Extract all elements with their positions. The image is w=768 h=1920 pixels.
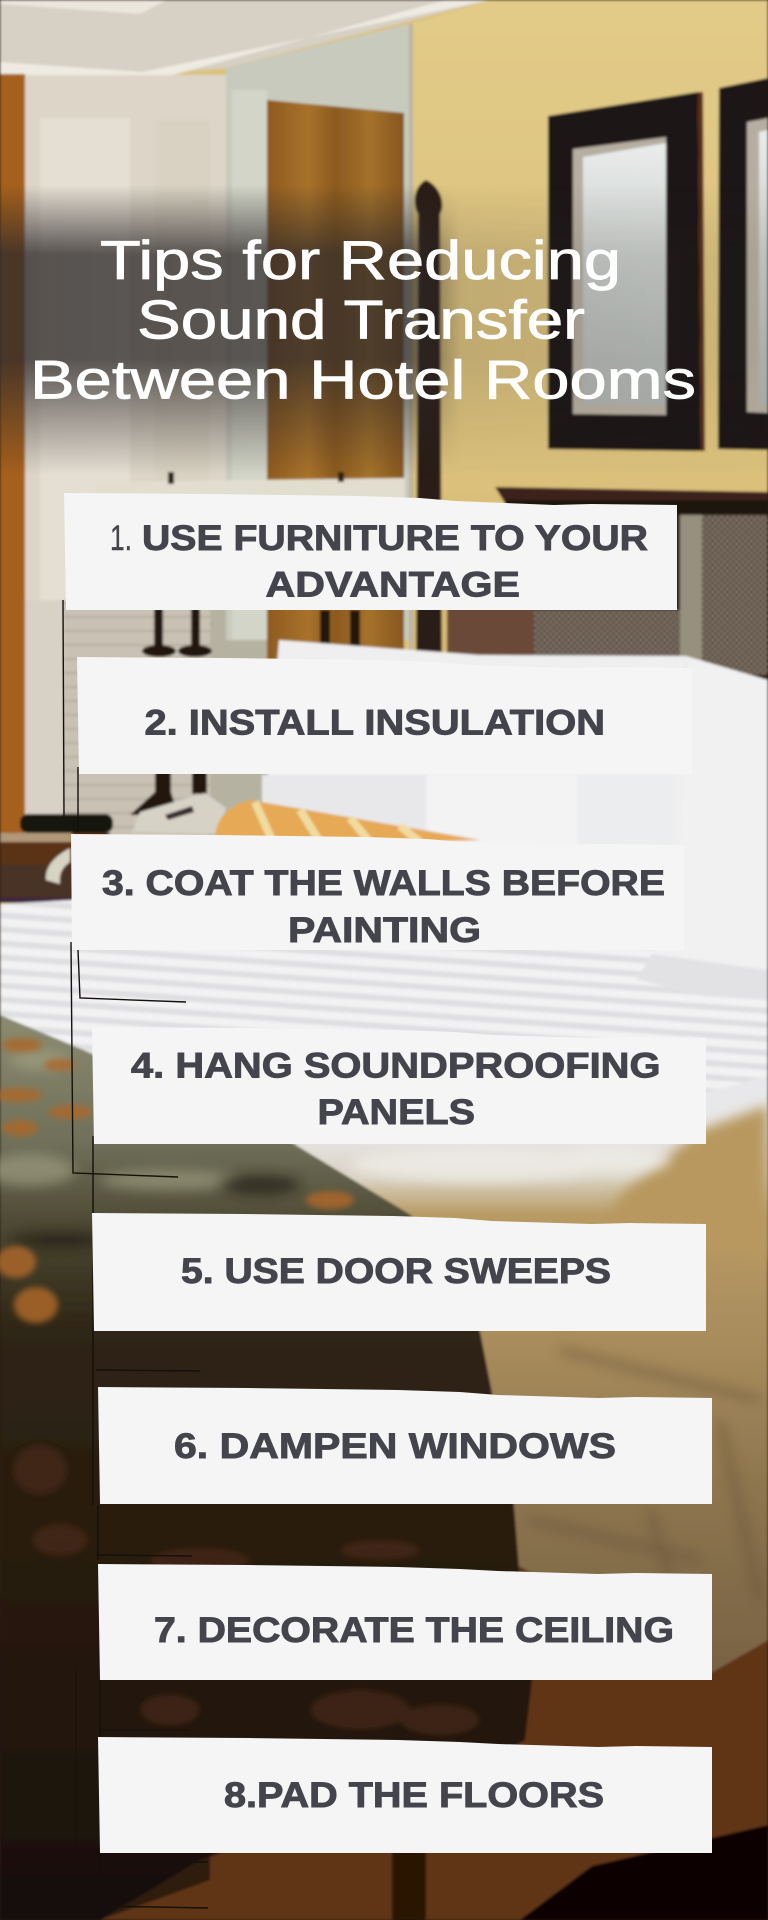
- headboard: [447, 487, 768, 682]
- lamp bases: [130, 608, 360, 815]
- wooden door strip: [0, 74, 25, 844]
- flowers: [0, 1038, 354, 1323]
- shutters wall: [0, 75, 228, 845]
- tip 8 panel: 8.PAD THE FLOORS: [224, 1775, 604, 1815]
- bed post: [415, 180, 442, 700]
- picture frame right: [718, 78, 768, 450]
- mirror: [226, 24, 412, 640]
- title: [30, 230, 696, 410]
- tip 6 panel: [98, 1387, 712, 1504]
- floral leaves: [0, 1050, 240, 1190]
- bed linen: [0, 896, 768, 1700]
- tip 1 panel: USE FURNITURE TO YOUR: [142, 518, 648, 558]
- bottom right shadow: [520, 1825, 768, 1920]
- tip 1 panel: 1.: [110, 518, 132, 558]
- yellow wall: [412, 0, 768, 700]
- dark shade behind title: [0, 185, 768, 475]
- curtain reflection: [267, 100, 404, 660]
- pillows: [262, 640, 686, 860]
- tip 7 panel: 7. DECORATE THE CEILING: [154, 1610, 674, 1650]
- title: Between Hotel Rooms: [30, 350, 696, 410]
- tip 6 panel: 6. DAMPEN WINDOWS: [174, 1426, 616, 1466]
- tip 1 panel: ADVANTAGE: [266, 564, 520, 604]
- tip 2 panel: [77, 657, 692, 774]
- floral runner: [0, 1015, 532, 1920]
- tip 4 panel: [92, 1027, 706, 1144]
- tip 3 panel: PAINTING: [288, 910, 481, 950]
- ceiling and moulding: [0, 0, 490, 84]
- picture frame left: [548, 92, 705, 451]
- right big pillow: [637, 656, 768, 1000]
- side table, remote, phone: [0, 793, 226, 903]
- tip 8 panel: [98, 1737, 712, 1853]
- tip 5 panel: [92, 1213, 706, 1331]
- hand drawn guide lines: [63, 600, 208, 1920]
- tip 4 panel: 4. HANG SOUNDPROOFING: [131, 1046, 660, 1086]
- tip 1 panel: [64, 493, 677, 610]
- title: Sound Transfer: [137, 290, 585, 350]
- lamp shade: [95, 478, 405, 500]
- tip 3 panel: [71, 834, 684, 950]
- floor: [100, 1566, 768, 1920]
- tip 4 panel: PANELS: [318, 1092, 475, 1132]
- hanging sheet: [294, 1076, 768, 1672]
- tip 2 panel: 2. INSTALL INSULATION: [144, 702, 605, 742]
- tip 7 panel: [98, 1564, 712, 1680]
- tip 3 panel: 3. COAT THE WALLS BEFORE: [102, 863, 665, 903]
- bolster cushion: [215, 800, 495, 966]
- tip 5 panel: 5. USE DOOR SWEEPS: [181, 1251, 611, 1291]
- title: Tips for Reducing: [100, 230, 621, 291]
